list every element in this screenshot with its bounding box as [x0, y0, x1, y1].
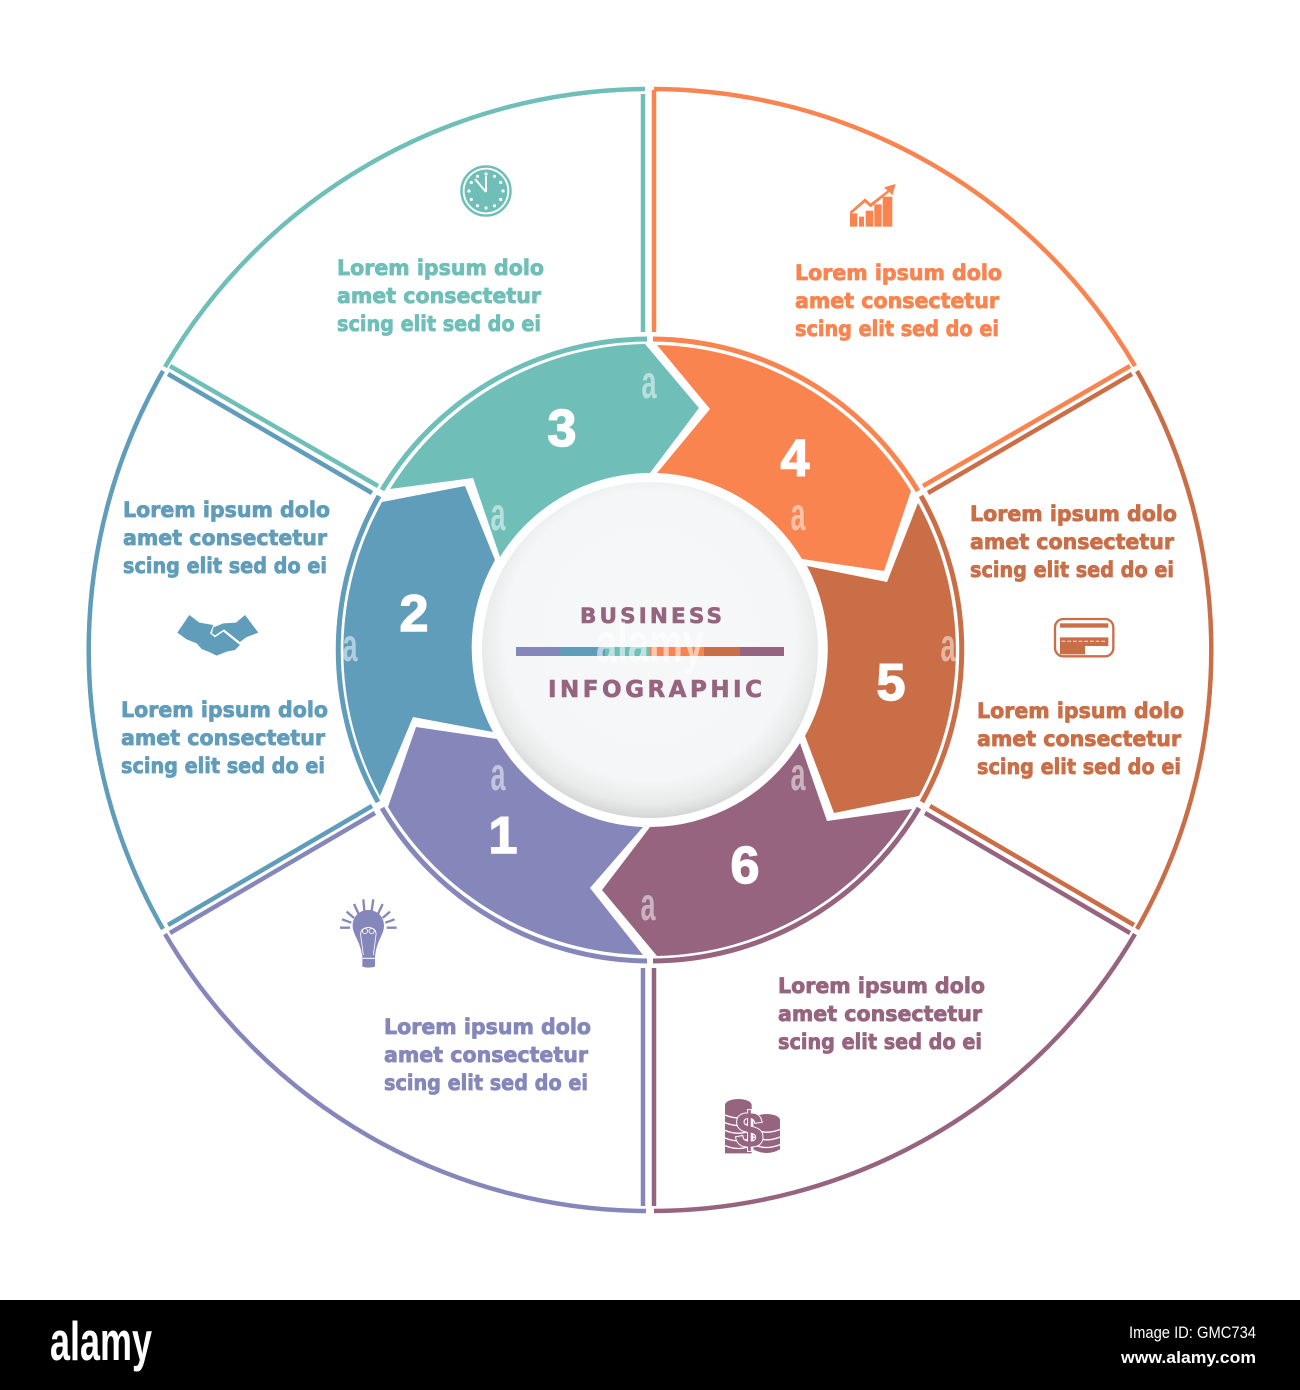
watermark letters: a [640, 878, 656, 930]
text: plum lorem: Lorem ipsum dolo [778, 974, 985, 999]
icon: light bulb [340, 899, 397, 968]
step 4 arrow segment [657, 345, 911, 571]
number 2: 2 [400, 585, 428, 643]
footer image id: Image ID: GMC734 [1129, 1323, 1256, 1342]
step 5 arrow segment [805, 503, 956, 813]
icon: clock [462, 166, 510, 216]
number 4: 4 [781, 430, 810, 488]
panel: step 1 periwinkle sector [165, 813, 646, 1211]
text: blue lorem upper [123, 498, 330, 579]
watermark letters [342, 356, 956, 930]
watermark letters: a [790, 488, 806, 540]
icon: growth chart [850, 184, 896, 227]
outer frame: teal [165, 89, 645, 486]
text: teal lorem [337, 256, 544, 337]
watermark letters: a [940, 619, 956, 671]
text: blue lorem lower: amet consectetur [121, 726, 325, 751]
center watermark: alamy [596, 611, 704, 674]
color bar [516, 647, 784, 656]
text: blue lorem upper: amet consectetur [123, 526, 327, 551]
center title: infographic: INFOGRAPHIC [548, 677, 762, 703]
watermark letters: a [790, 748, 806, 800]
text: rust lorem upper: Lorem ipsum dolo [970, 502, 1177, 527]
icon: credit card [1055, 619, 1113, 656]
text: rust lorem upper [970, 502, 1177, 583]
icon: coins with dollar [725, 1099, 780, 1158]
text: orange lorem: scing elit sed do ei [795, 317, 999, 342]
step 1 arrow segment [388, 727, 643, 955]
text: orange lorem: Lorem ipsum dolo [795, 261, 1002, 286]
number 6: 6 [731, 837, 759, 895]
text: periwinkle lorem: amet consectetur [384, 1043, 588, 1068]
text: rust lorem lower: Lorem ipsum dolo [977, 699, 1184, 724]
text: orange lorem [795, 261, 1002, 342]
text: rust lorem upper: amet consectetur [970, 530, 1174, 555]
text: rust lorem lower: amet consectetur [977, 727, 1181, 752]
text: teal lorem: scing elit sed do ei [337, 312, 541, 337]
panel: step 2 blue sector [89, 371, 372, 929]
number 3: 3 [548, 400, 576, 458]
outer frame: orange [654, 89, 1135, 486]
panel: step 6 plum sector [654, 813, 1135, 1211]
step 3 arrow segment [390, 344, 699, 557]
text: plum lorem [778, 974, 985, 1055]
text: periwinkle lorem: Lorem ipsum dolo [384, 1015, 591, 1040]
panel: step 5 rust sector [928, 371, 1211, 929]
icon: coins with dollar: $ [735, 1102, 763, 1158]
footer logo: alamy [50, 1310, 152, 1372]
number 1: 1 [489, 807, 517, 865]
text: blue lorem lower: scing elit sed do ei [121, 754, 325, 779]
outer frame: blue [89, 371, 372, 929]
text: blue lorem upper: Lorem ipsum dolo [123, 498, 330, 523]
icon: handshake [177, 615, 258, 656]
text: periwinkle lorem [384, 1015, 591, 1096]
outer frame: plum [654, 813, 1135, 1211]
footer url: www.alamy.com [1120, 1348, 1256, 1367]
text: plum lorem: scing elit sed do ei [778, 1030, 982, 1055]
text: blue lorem lower: Lorem ipsum dolo [121, 698, 328, 723]
text: rust lorem lower [977, 699, 1184, 780]
footer bar [0, 1300, 1300, 1390]
watermark letters: a [342, 619, 358, 671]
text: rust lorem lower: scing elit sed do ei [977, 755, 1181, 780]
watermark letters: a [490, 748, 506, 800]
outer frame: periwinkle [165, 813, 646, 1211]
text: orange lorem: amet consectetur [795, 289, 999, 314]
text: rust lorem upper: scing elit sed do ei [970, 558, 1174, 583]
center title: business: BUSINESS [580, 604, 722, 629]
step 6 arrow segment [602, 743, 912, 956]
number 5: 5 [877, 654, 905, 712]
text: teal lorem: Lorem ipsum dolo [337, 256, 544, 281]
panel: step 4 orange sector [654, 89, 1135, 486]
center disc [475, 475, 825, 825]
text: plum lorem: amet consectetur [778, 1002, 982, 1027]
watermark letters: a [642, 356, 657, 408]
text: blue lorem lower [121, 698, 328, 779]
panel: step 3 teal sector [165, 89, 645, 486]
inner ring arcs [338, 339, 962, 961]
step 2 arrow segment [343, 486, 495, 796]
outer frame: rust [928, 371, 1211, 929]
text: blue lorem upper: scing elit sed do ei [123, 554, 327, 579]
watermark letters: a [490, 488, 506, 540]
text: periwinkle lorem: scing elit sed do ei [384, 1071, 588, 1096]
text: teal lorem: amet consectetur [337, 284, 541, 309]
